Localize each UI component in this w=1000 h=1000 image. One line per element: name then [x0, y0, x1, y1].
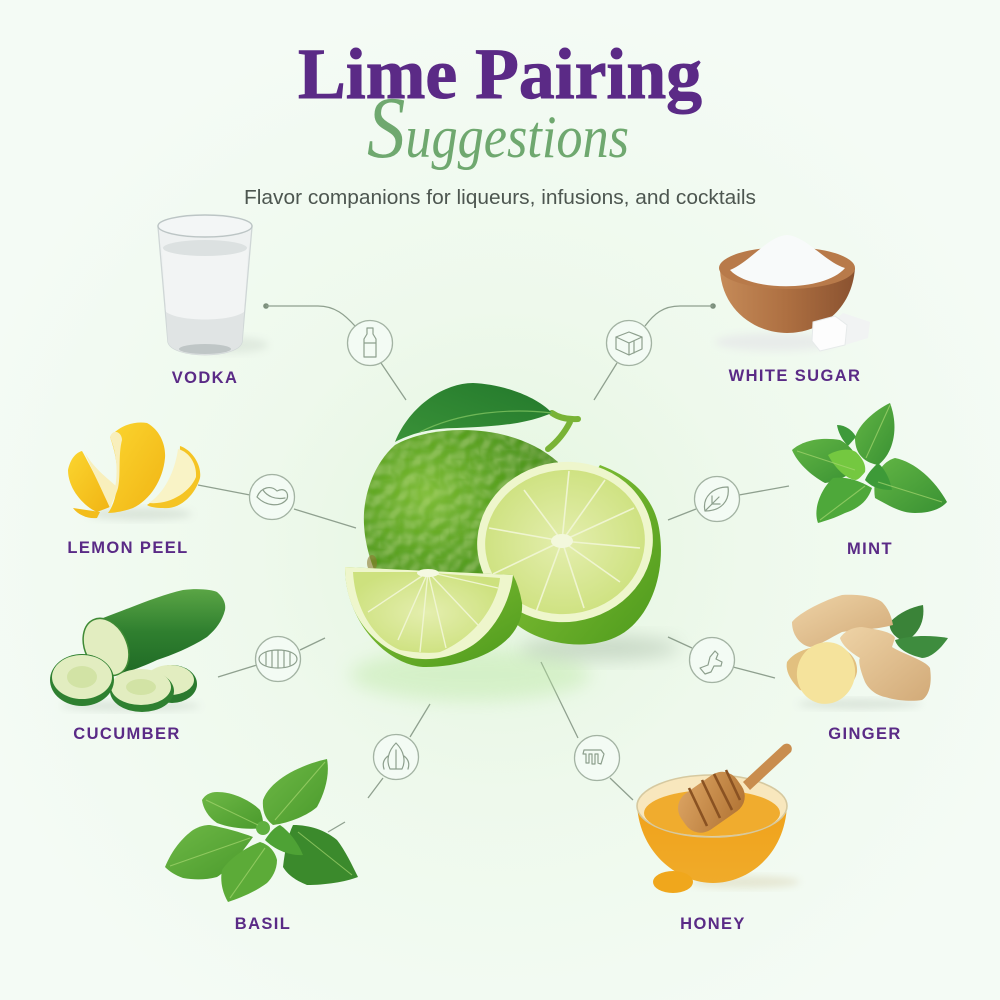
central glow	[350, 649, 590, 701]
icon: cucumber slices	[256, 636, 300, 682]
lime shadow	[520, 636, 680, 660]
label: mint: MINT	[847, 540, 893, 558]
script subtitle: Suggestions	[367, 80, 629, 177]
icon: basil	[374, 734, 418, 780]
label: white sugar: WHITE SUGAR	[729, 367, 861, 385]
lemon peel	[68, 423, 200, 520]
vodka glass	[158, 215, 268, 355]
label: cucumber: CUCUMBER	[73, 725, 181, 743]
lime leaf	[395, 383, 552, 442]
cucumber	[50, 589, 225, 712]
label: basil: BASIL	[235, 915, 291, 933]
whole lime	[364, 413, 578, 612]
icon: honey dipper	[574, 736, 620, 780]
connector: white sugar	[594, 303, 716, 400]
basil	[165, 759, 358, 902]
connector: lemon peel	[198, 485, 356, 528]
label: honey: HONEY	[680, 915, 746, 933]
icon: leaf	[694, 476, 740, 522]
label: ginger: GINGER	[828, 725, 902, 743]
connector: vodka	[263, 303, 406, 400]
title: Lime Pairing	[298, 34, 702, 114]
icon: bottle	[348, 320, 392, 366]
connector: cucumber	[218, 638, 325, 677]
central lime group	[345, 383, 680, 667]
connector: honey	[541, 662, 633, 800]
ginger	[787, 595, 948, 710]
icon: sugar cube	[606, 320, 652, 366]
half lime	[467, 451, 663, 644]
connector: ginger	[668, 637, 775, 678]
honey bowl	[637, 744, 800, 893]
sugar bowl	[715, 235, 870, 351]
tagline: Flavor companions for liqueurs, infusions, and cocktails	[244, 187, 756, 209]
connector: basil	[328, 704, 430, 832]
connector: mint	[668, 486, 789, 520]
mint	[792, 403, 947, 523]
label: lemon peel: LEMON PEEL	[67, 539, 189, 557]
icon: ginger	[690, 638, 734, 682]
label: vodka: VODKA	[172, 369, 238, 387]
icon: peel	[250, 474, 294, 520]
lime wedge	[345, 567, 522, 667]
